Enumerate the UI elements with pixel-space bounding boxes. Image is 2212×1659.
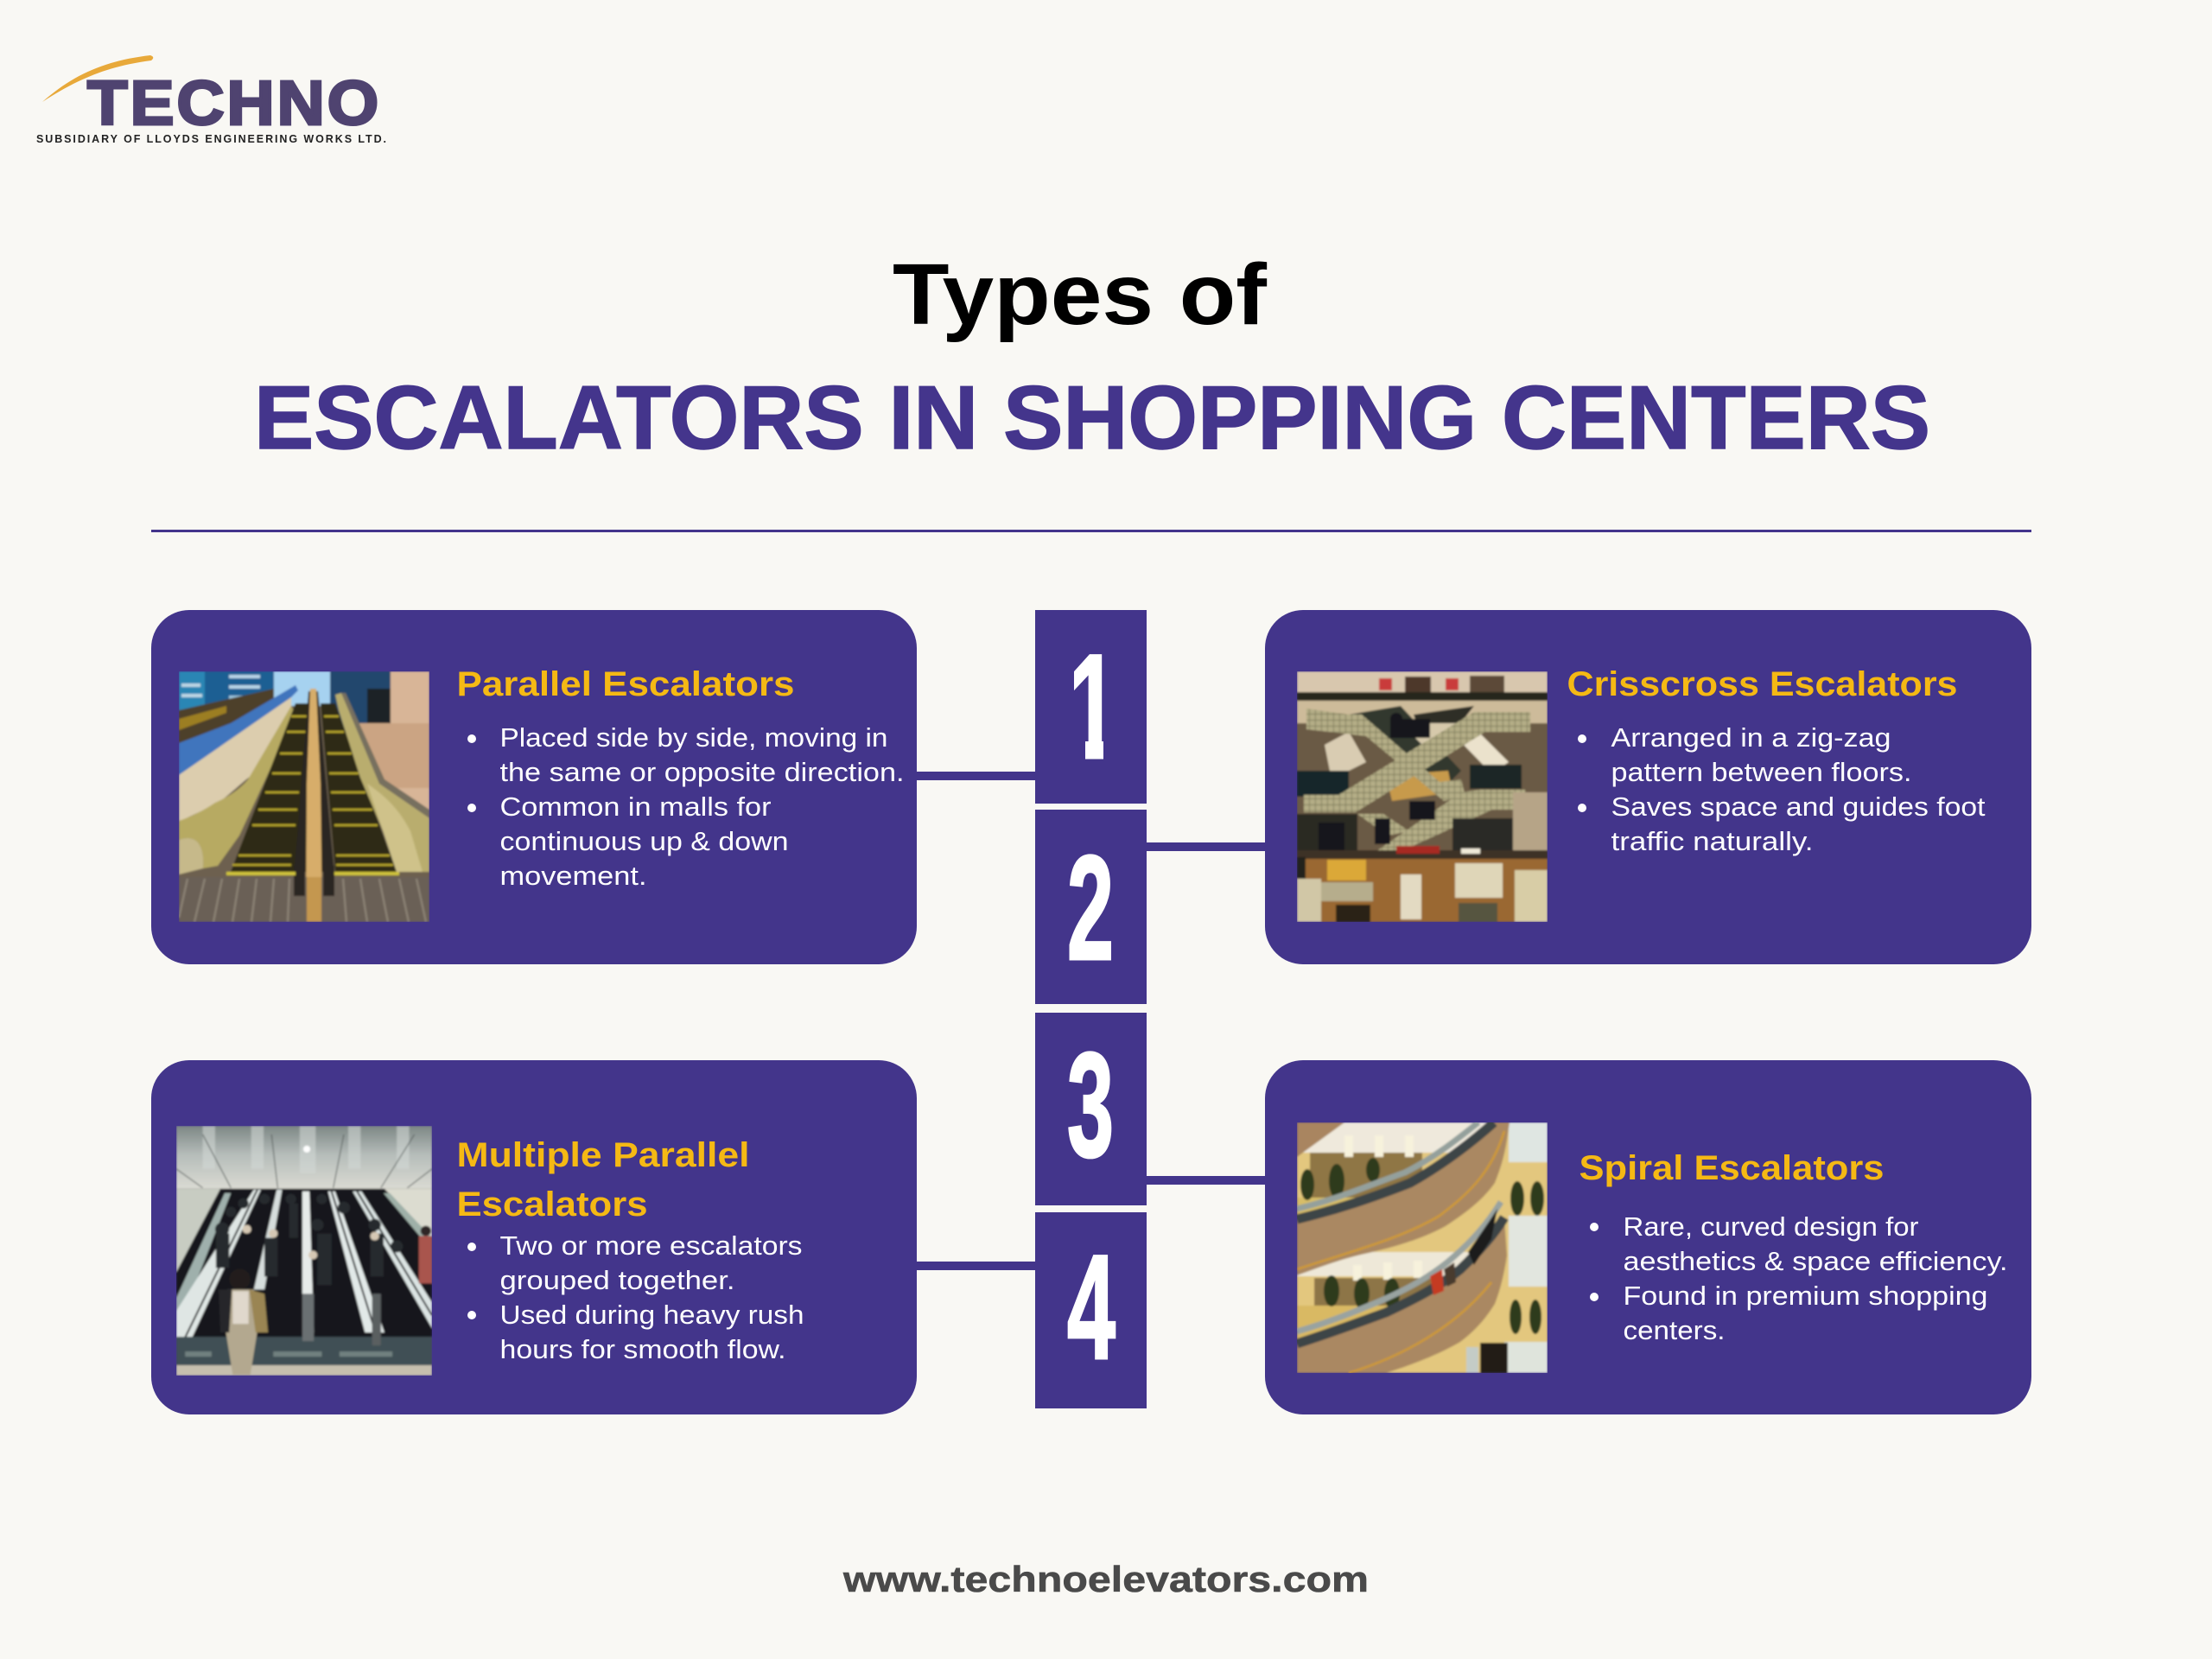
logo <box>36 55 386 145</box>
heading: multiple parallel escalators: Multiple Parallel <box>456 1136 750 1174</box>
bullet list: spiral escalators <box>1590 1211 2008 1345</box>
logo tagline: SUBSIDIARY OF LLOYDS ENGINEERING WORKS LTD. <box>36 133 386 145</box>
title line 1: Types of <box>893 246 1268 343</box>
bullet list: spiral escalators: Rare, curved design for <box>1623 1211 1918 1242</box>
bullet list: multiple parallel escalators: grouped together. <box>499 1265 734 1295</box>
photo: parallel escalators <box>179 671 429 922</box>
bullet list: crisscross escalators: Arranged in a zig-zag <box>1611 722 1891 753</box>
bullet list: spiral escalators: aesthetics & space efficiency. <box>1623 1246 2008 1276</box>
number column <box>1035 610 1147 1408</box>
bullet list: crisscross escalators: traffic naturally. <box>1611 826 1813 856</box>
connector 3 <box>1145 1176 1270 1185</box>
bullet list: spiral escalators: centers. <box>1623 1315 1725 1345</box>
bullet list: multiple parallel escalators <box>467 1230 804 1364</box>
bullet list: crisscross escalators: pattern between floors. <box>1611 757 1911 787</box>
bullet list: parallel escalators <box>467 722 904 891</box>
bullet list: parallel escalators: movement. <box>499 861 646 891</box>
number 2 <box>1035 810 1147 1004</box>
logo swoosh <box>42 55 153 102</box>
bullet list: parallel escalators: the same or opposite direction. <box>499 757 904 787</box>
bullet list: multiple parallel escalators: hours for smooth flow. <box>499 1334 786 1364</box>
bullet list: crisscross escalators <box>1578 722 1986 856</box>
heading: multiple parallel escalators: Escalators <box>456 1185 648 1224</box>
bullet list: crisscross escalators: Saves space and guides foot <box>1611 791 1986 822</box>
bullet list: multiple parallel escalators: Used during heavy rush <box>499 1300 804 1330</box>
bullet list: parallel escalators: continuous up & down <box>499 826 788 856</box>
bullet list: spiral escalators: Found in premium shopping <box>1623 1281 1987 1311</box>
number 1 <box>1035 610 1147 804</box>
heading: parallel escalators: Parallel Escalators <box>456 665 795 703</box>
number 3 <box>1035 1013 1147 1205</box>
panel: multiple parallel escalators <box>151 1060 917 1414</box>
bullet list: parallel escalators: Placed side by side, moving in <box>499 722 888 753</box>
logo wordmark: TECHNO <box>87 68 378 138</box>
bullet list: multiple parallel escalators: Two or more escalators <box>499 1230 802 1261</box>
number 1: 1 <box>1069 624 1117 790</box>
bullet list: parallel escalators: Common in malls for <box>499 791 771 822</box>
photo: crisscross escalators <box>1297 671 1548 922</box>
heading: crisscross escalators: Crisscross Escalators <box>1567 665 1958 703</box>
number 4: 4 <box>1067 1224 1116 1390</box>
panel: crisscross escalators <box>1265 610 2031 964</box>
title <box>254 246 1930 468</box>
connector 1 <box>912 772 1037 780</box>
title line 2: ESCALATORS IN SHOPPING CENTERS <box>254 368 1930 468</box>
footer website: www.technoelevators.com <box>842 1559 1369 1599</box>
photo: multiple parallel escalators <box>176 1126 432 1376</box>
connector 4 <box>912 1262 1037 1270</box>
photo: spiral escalators <box>1297 1122 1548 1373</box>
panel: spiral escalators <box>1265 1060 2031 1414</box>
number 3: 3 <box>1067 1022 1114 1188</box>
number 2: 2 <box>1067 825 1114 991</box>
connector 2 <box>1145 842 1270 851</box>
number 4 <box>1035 1212 1147 1408</box>
panel: parallel escalators <box>151 610 917 964</box>
heading: spiral escalators: Spiral Escalators <box>1580 1149 1884 1187</box>
heading: multiple parallel escalators <box>456 1136 750 1224</box>
